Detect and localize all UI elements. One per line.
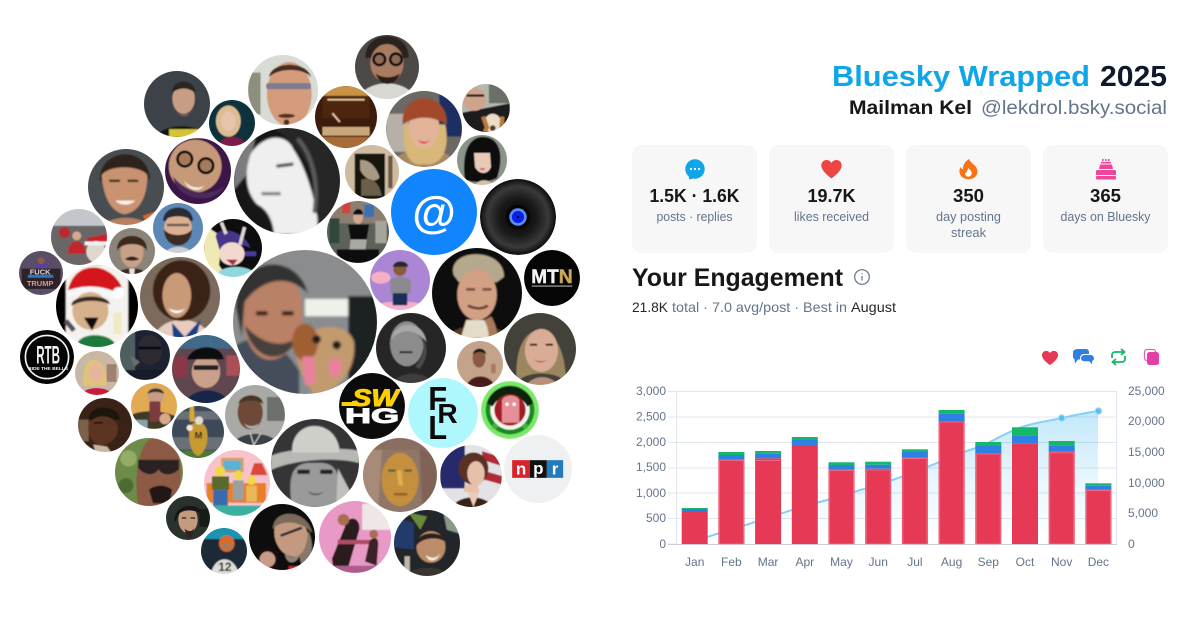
icon: flame	[959, 159, 977, 179]
avatar: mirror selfie	[122, 374, 186, 438]
panel: days on Bluesky: 365	[1090, 186, 1121, 206]
panel: likes received: likes received	[794, 210, 869, 224]
avatar: yellow mascot at stadium: M	[195, 430, 203, 440]
month labels: Feb	[721, 555, 742, 569]
bar: Oct	[1012, 427, 1038, 544]
avatar: at sign on blue	[391, 169, 477, 255]
avatar: FRL logo: F	[428, 381, 447, 418]
avatar: DJ among records	[327, 201, 389, 263]
left axis labels: 1,500	[636, 460, 666, 474]
left axis labels: 1,000	[636, 486, 666, 500]
chart legend	[1042, 349, 1159, 365]
user name and handle: Mailman Kel	[849, 98, 972, 119]
avatar: long-haired woman	[504, 313, 576, 385]
avatar: woman before US flag	[440, 445, 502, 507]
avatar: at sign on blue: @	[412, 188, 456, 237]
avatar: mustached man in suit	[109, 228, 155, 274]
avatar: pink room guitarists	[319, 501, 391, 573]
cumulative area	[695, 411, 1098, 544]
bar: Jan	[682, 508, 708, 544]
heading: your engagement: Your Engagement	[632, 264, 844, 292]
avatar: curly-haired woman	[140, 257, 220, 337]
title: 2025	[1100, 61, 1167, 93]
month labels: Jun	[869, 555, 888, 569]
avatar: man in truck	[213, 373, 297, 457]
panel: posting streak: streak	[951, 226, 987, 240]
avatar: NPR logo	[504, 435, 572, 503]
avatar: RTB logo	[20, 330, 74, 384]
bar: Mar	[755, 451, 781, 544]
avatar: dark-haired man	[157, 487, 219, 549]
avatar: woman in front of grey backdrop	[88, 149, 164, 225]
icon: heart	[821, 160, 842, 178]
avatar: woman in rust beanie	[386, 91, 462, 167]
month labels	[685, 555, 1109, 569]
avatar: couple selfie	[236, 491, 328, 583]
avatar: FRL logo: R	[437, 398, 458, 429]
avatar: santa parade group	[51, 209, 107, 265]
avatar: bearded man on blue	[153, 203, 203, 253]
avatar: SW HG logo: SW	[352, 385, 401, 412]
month labels: Jul	[907, 555, 923, 569]
month labels: Jan	[685, 555, 704, 569]
month labels: Apr	[795, 555, 814, 569]
avatar: football player number 12	[192, 519, 256, 583]
month labels: May	[830, 555, 853, 569]
bar: Apr	[792, 437, 818, 544]
bar: Jun	[865, 462, 891, 544]
right axis labels: 10,000	[1128, 476, 1165, 490]
right axis labels: 15,000	[1128, 445, 1165, 459]
bar: Nov	[1049, 441, 1075, 544]
right axis labels: 0	[1128, 537, 1135, 551]
right axis labels: 20,000	[1128, 414, 1165, 428]
avatar: MTN logo	[524, 250, 580, 306]
avatar: man in black tee	[144, 71, 210, 137]
user name and handle: @lekdrol.bsky.social	[981, 98, 1167, 119]
panel: posting streak	[906, 145, 1031, 253]
avatar: blonde woman	[209, 100, 255, 146]
engagement summary: total · 7.0 avg/post · Best in	[672, 299, 847, 315]
avatar: protest sign: FUCK	[30, 267, 51, 276]
icon: info	[855, 270, 869, 284]
icon: legend heart	[1042, 351, 1058, 365]
month labels: Oct	[1016, 555, 1035, 569]
panel: posts and replies: posts · replies	[656, 210, 732, 224]
avatar: caricature in santa hat	[56, 265, 138, 347]
avatar: protest sign: TRUMP	[27, 279, 53, 288]
month labels: Aug	[941, 555, 962, 569]
avatar: green badge logo	[481, 381, 539, 439]
avatar: man in cap at crowd	[158, 321, 254, 417]
avatar: MTN logo: MT	[531, 266, 559, 288]
panel: likes received	[769, 145, 894, 253]
avatar: RTB logo: RTB	[36, 342, 60, 369]
avatar: SW HG logo	[339, 373, 405, 439]
avatar: bald man, monochrome	[376, 313, 446, 383]
avatar: football player number 12: 12	[218, 560, 232, 574]
chart: monthly engagement with cumulative line	[636, 384, 1165, 569]
avatar: glasses and beard on shelves	[355, 35, 419, 99]
avatar: man in maroon shirt	[457, 341, 503, 387]
avatar: yellow mascot at stadium	[162, 396, 234, 468]
engagement summary: August	[851, 299, 896, 315]
bar: May	[828, 462, 854, 544]
month labels: Nov	[1051, 555, 1072, 569]
icon: legend reposts	[1112, 349, 1125, 365]
avatar: man with rimless glasses	[248, 55, 318, 125]
avatar: woman with black bangs	[457, 135, 507, 185]
bar: Aug	[939, 410, 965, 544]
panel: likes received: 19.7K	[808, 186, 856, 206]
left axis labels: 3,000	[636, 384, 666, 398]
avatar: FRL logo: L	[428, 409, 447, 446]
bar: Sep	[975, 442, 1001, 544]
bar: Jul	[902, 449, 928, 544]
avatar: framed artwork	[345, 145, 399, 199]
left axis labels: 500	[646, 511, 666, 525]
avatar: bearded man with dogs	[233, 250, 377, 394]
icon: legend quotes	[1144, 350, 1159, 365]
avatar: vinyl record	[480, 179, 556, 255]
cumulative line	[695, 411, 1098, 541]
avatar: NPR logo: p	[533, 459, 544, 478]
avatar: vintage meter	[315, 86, 377, 148]
icon: birthday cake	[1096, 159, 1116, 180]
avatar: golden painted face	[363, 438, 437, 512]
panel: posts and replies	[632, 145, 757, 253]
avatar: NPR logo: n	[516, 459, 526, 478]
engagement summary: 21.8K	[632, 299, 669, 315]
left axis labels: 0	[659, 537, 666, 551]
line markers	[1058, 408, 1102, 421]
avatar: cartoon on lilac	[370, 250, 430, 310]
avatar: protest sign	[19, 251, 63, 295]
month labels: Mar	[758, 555, 778, 569]
panel: days on Bluesky	[1043, 145, 1168, 253]
avatar: cartoon family on sofa	[191, 437, 283, 529]
user name and handle	[849, 98, 1167, 119]
month labels: Dec	[1088, 555, 1109, 569]
avatar: MTN logo: N	[559, 266, 573, 288]
avatar: RTB logo: RIDE THE BELLS	[28, 366, 69, 372]
avatar: NPR logo: r	[552, 459, 559, 478]
panel: posts and replies: 1.5K · 1.6K	[650, 186, 740, 206]
avatar: man in sunglasses against leaves	[101, 424, 197, 520]
avatar: SW HG logo: HG	[345, 405, 399, 428]
avatar: anime character	[204, 219, 262, 277]
icon: legend replies	[1073, 349, 1094, 364]
avatar bubble cluster	[10, 22, 590, 589]
avatar: woman in cowboy hat	[271, 419, 359, 507]
avatar: blonde woman in red	[66, 342, 128, 404]
panel: posting streak: day posting	[936, 210, 1001, 224]
avatar: dark-toned woman	[110, 320, 180, 390]
avatar: FRL logo	[408, 378, 478, 448]
title: Bluesky Wrapped	[832, 61, 1090, 93]
left axis labels	[636, 384, 666, 551]
right axis labels: 25,000	[1128, 384, 1165, 398]
month labels: Sep	[978, 555, 999, 569]
panel: posting streak: 350	[953, 186, 984, 206]
bar: Dec	[1085, 483, 1111, 544]
left axis labels: 2,500	[636, 410, 666, 424]
left axis labels: 2,000	[636, 435, 666, 449]
avatar: close-up man in shadow	[67, 387, 143, 463]
avatar: man with beagle	[462, 84, 510, 132]
bar: Feb	[718, 452, 744, 544]
avatar: old man with wild hair	[432, 248, 522, 338]
engagement summary	[632, 299, 896, 315]
right axis labels	[1128, 384, 1165, 551]
avatar: black and white woman in profile	[234, 128, 340, 234]
avatar: smiling man with pack	[394, 510, 460, 576]
avatar: man with black glasses, purple tint	[165, 138, 231, 204]
panel: days on Bluesky: days on Bluesky	[1060, 210, 1151, 224]
right axis labels: 5,000	[1128, 506, 1158, 520]
icon: speech bubble	[685, 159, 705, 180]
